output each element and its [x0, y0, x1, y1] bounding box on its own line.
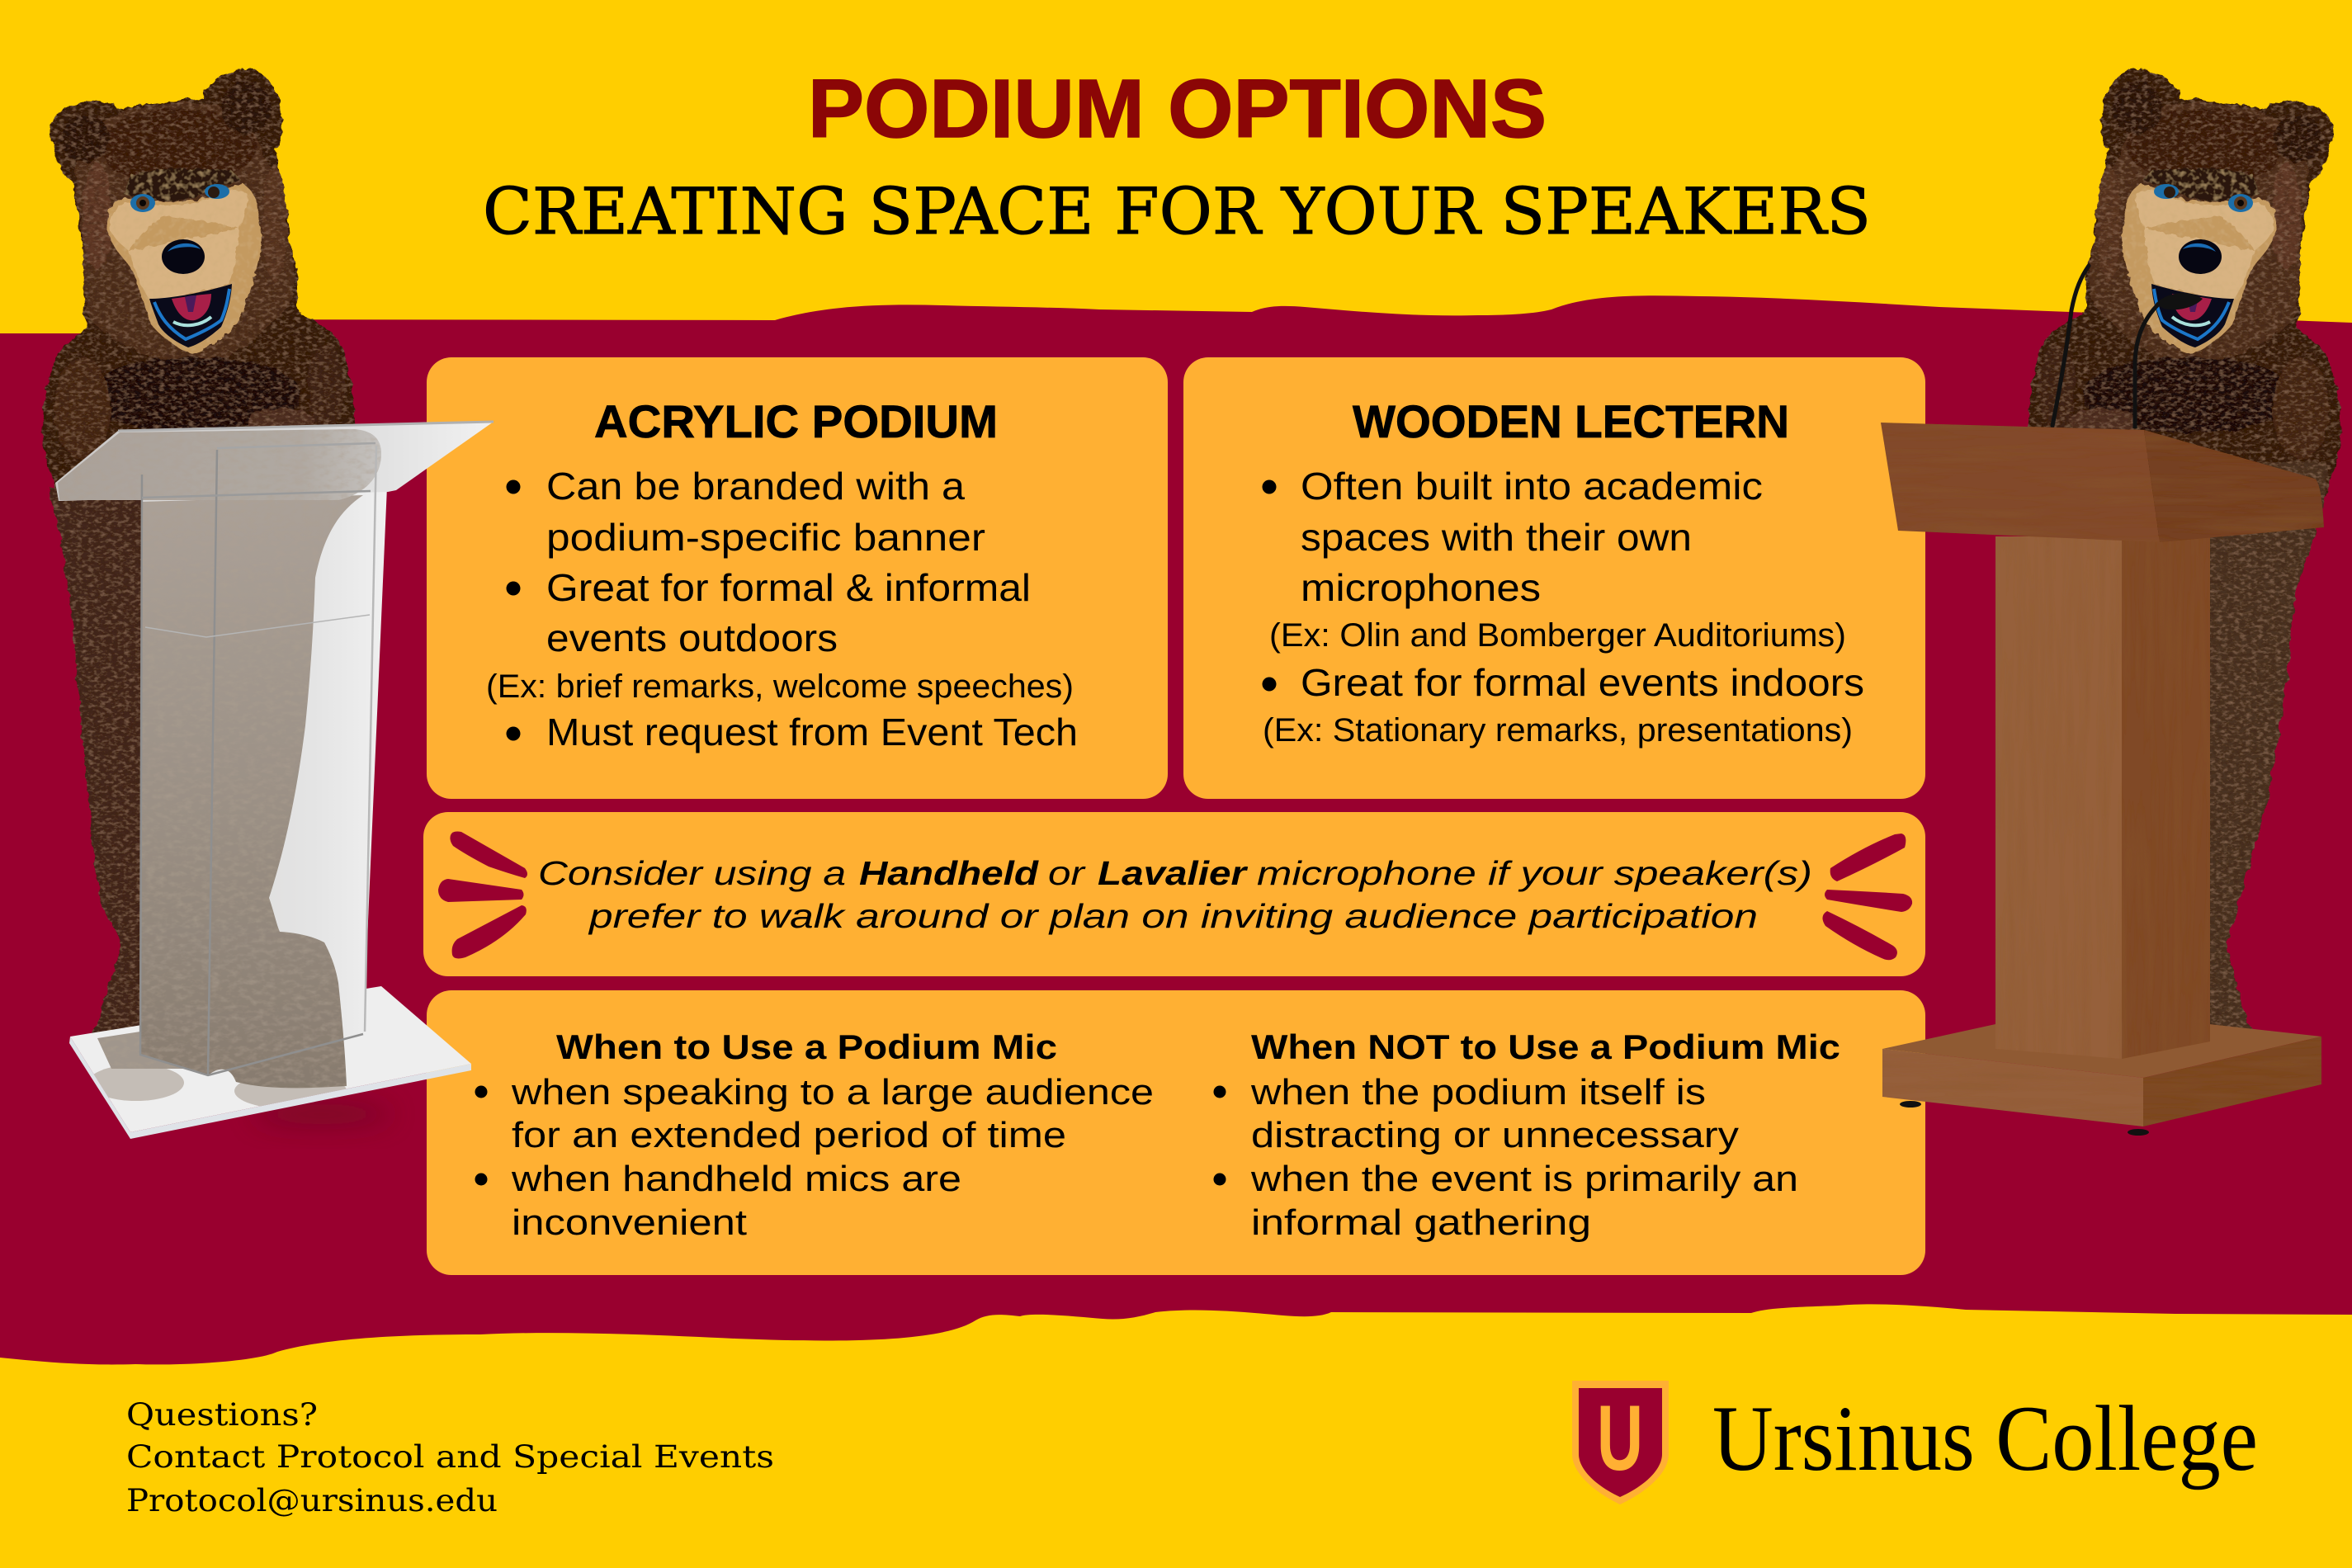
- list: acrylic podium points: Must request from Event Tech: [546, 711, 1078, 753]
- bear seen through acrylic: upper body and paw: [58, 429, 381, 500]
- column: when not to use: informal gathering: [1251, 1202, 1591, 1243]
- footer: contact information: Protocol@ursinus.edu: [126, 1483, 498, 1518]
- list: wooden lectern points: Often built into academic: [1301, 465, 1763, 508]
- wordmark: Ursinus College: [1712, 1387, 2258, 1490]
- column: when not to use: when the event is primarily an: [1250, 1159, 1798, 1199]
- panel: podium mic guidance: [427, 990, 1925, 1275]
- footer: contact information: Contact Protocol and Special Events: [126, 1439, 774, 1475]
- podium base: [69, 986, 471, 1139]
- text: microphone advice: microphone if your speaker(s): [1257, 854, 1812, 892]
- footer: contact information: Questions?: [126, 1397, 318, 1433]
- podium reading surface: [55, 422, 494, 501]
- title: PODIUM OPTIONS: [808, 63, 1547, 155]
- list: acrylic podium points: podium-specific banner: [546, 516, 985, 559]
- bear lower body, left edge: [50, 487, 149, 1038]
- maroon wavy band: [0, 295, 2352, 1364]
- column: when to use: when handheld mics are: [511, 1159, 961, 1199]
- list: acrylic podium points: events outdoors: [546, 616, 838, 659]
- illustration: wooden lectern: [1881, 423, 2324, 1136]
- column: when to use: inconvenient: [512, 1202, 747, 1243]
- panel: acrylic podium: [427, 357, 1168, 799]
- lectern top: [1881, 423, 2324, 542]
- list: wooden lectern points: (Ex: Stationary remarks, presentations): [1263, 712, 1853, 749]
- list: wooden lectern points: Great for formal events indoors: [1301, 661, 1864, 704]
- lectern base: [1882, 1024, 2321, 1136]
- logo: Ursinus College: [1572, 1381, 2258, 1504]
- bear seen through acrylic: [140, 495, 363, 1088]
- icon: right microphone: [2135, 293, 2203, 428]
- icon: shield: U: [1597, 1386, 1643, 1490]
- list: acrylic podium points: [486, 465, 1078, 753]
- heading: acrylic podium: ACRYLIC PODIUM: [594, 395, 998, 447]
- illustration: acrylic podium: [55, 422, 494, 1139]
- column: when not to use: When NOT to Use a Podium Mic: [1251, 1027, 1840, 1066]
- list: wooden lectern points: microphones: [1301, 566, 1541, 609]
- panel: wooden lectern: [1183, 357, 1925, 799]
- illustration: left bear mascot: [43, 69, 358, 1038]
- column: when to use: for an extended period of time: [512, 1115, 1066, 1155]
- bear lower body, right edge: [2203, 462, 2327, 1030]
- icon: left burst: [438, 832, 527, 958]
- list: acrylic podium points: (Ex: brief remarks, welcome speeches): [486, 668, 1074, 705]
- list: acrylic podium points: Can be branded with a: [546, 465, 965, 508]
- column: when to use: [475, 1027, 1154, 1243]
- text: microphone advice: Handheld: [859, 854, 1039, 892]
- list: acrylic podium points: Great for formal & informal: [546, 566, 1031, 609]
- text: microphone advice: Consider using a: [538, 854, 846, 892]
- list: wooden lectern points: (Ex: Olin and Bomberger Auditoriums): [1269, 617, 1846, 654]
- list: wooden lectern points: spaces with their own: [1301, 516, 1692, 559]
- bear seen through acrylic: base foot patch: [97, 1032, 186, 1069]
- icon: shield: [1572, 1381, 1669, 1504]
- subtitle: CREATING SPACE FOR YOUR SPEAKERS: [483, 175, 1871, 249]
- podium shadow: [252, 1103, 392, 1126]
- text: microphone advice: or: [1048, 854, 1087, 892]
- column: when not to use: [1213, 1027, 1840, 1243]
- podium column: [140, 487, 387, 1075]
- icon: left microphone: [2052, 266, 2089, 426]
- list: wooden lectern points: [1263, 465, 1864, 749]
- lectern column: [1995, 536, 2210, 1059]
- illustration: right bear mascot: [2025, 69, 2340, 1030]
- podium edge lines: [118, 422, 494, 1075]
- footer: contact information: [126, 1397, 774, 1518]
- callout: microphone tip: [423, 812, 1925, 976]
- column: when not to use: distracting or unnecessary: [1251, 1115, 1739, 1155]
- column: when to use: when speaking to a large audience: [511, 1072, 1154, 1112]
- text: microphone advice: Lavalier: [1098, 854, 1248, 892]
- column: when not to use: when the podium itself is: [1250, 1072, 1706, 1112]
- text: microphone advice: [538, 854, 1812, 935]
- column: when to use: When to Use a Podium Mic: [556, 1027, 1057, 1066]
- heading: wooden lectern: WOODEN LECTERN: [1353, 395, 1789, 447]
- text: microphone advice: prefer to walk around or plan on inviting audience participation: [587, 897, 1758, 935]
- icon: right burst: [1822, 834, 1912, 960]
